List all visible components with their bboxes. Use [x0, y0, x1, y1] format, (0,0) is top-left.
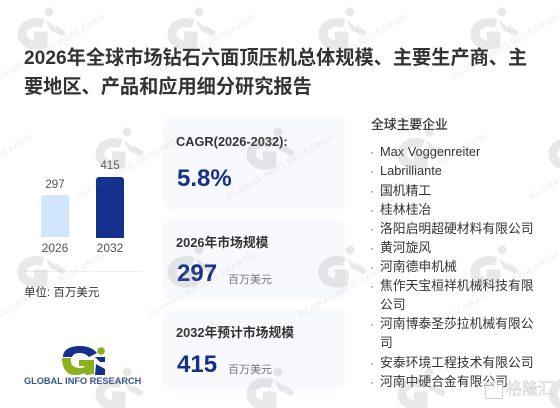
company list: Max Voggenreiter [380, 144, 480, 159]
CAGR value: 5.8% [177, 165, 232, 192]
company list: 焦作天宝桓祥机械科技有限 [380, 278, 534, 293]
panel: 2026 market size [163, 219, 345, 299]
gelonghui watermark: 格隆汇 [506, 381, 554, 398]
logo [24, 346, 141, 386]
company list: 国机精工 [380, 182, 431, 198]
company list: 安泰环境工程技术有限公司 [380, 355, 534, 370]
company list: · [370, 356, 374, 370]
company list: · [370, 260, 374, 274]
company list: 黄河旋风 [380, 240, 431, 255]
company list: 河南中硬合金有限公司 [380, 374, 508, 389]
company list: 桂林桂冶 [380, 202, 431, 216]
company list: · [370, 241, 374, 255]
2032 unit: 百万美元 [228, 364, 272, 376]
year 2032: 2032 [97, 241, 123, 255]
company list: 司 [380, 335, 393, 350]
bar 2026 [41, 195, 69, 237]
bar chart [41, 160, 124, 255]
company list: · [370, 164, 374, 178]
company list: · [370, 145, 374, 159]
CAGR label: CAGR(2026-2032): [176, 134, 288, 149]
year 2026: 2026 [42, 241, 68, 255]
panel: CAGR [163, 117, 345, 209]
panel: 2032 market size [163, 309, 345, 389]
2026 value: 297 [177, 260, 217, 287]
company list: 公司 [380, 297, 406, 312]
text: GLOBAL INFO RESEARCH [449, 12, 560, 82]
company list: · [370, 184, 374, 198]
text: GLOBAL INFO RESEARCH [376, 132, 487, 202]
text: GLOBAL INFO RESEARCH [297, 12, 408, 82]
2032 label: 2032年预计市场规模 [176, 325, 294, 340]
logo mark [62, 346, 105, 375]
text: GLOBAL INFO RESEARCH [146, 12, 257, 82]
text: GLOBAL INFO RESEARCH [74, 132, 185, 202]
value 415: 415 [100, 160, 120, 172]
2032 value: 415 [177, 351, 217, 378]
logo text: GLOBAL INFO RESEARCH [24, 376, 141, 386]
company list: · [370, 222, 374, 236]
company list: 洛阳启明超硬材料有限公司 [380, 220, 534, 236]
company list: Labrilliante [380, 163, 442, 178]
2026 label: 2026年市场规模 [176, 235, 268, 250]
text: GLOBAL INFO RESEARCH [146, 250, 257, 320]
title: 2026年全球市场钻石六面顶压机总体规模、主要生产商、主 [24, 48, 527, 69]
bar 2032 [96, 177, 124, 238]
company list [370, 144, 534, 389]
text: GLOBAL INFO RESEARCH [225, 132, 336, 202]
unit note: 单位: 百万美元 [24, 287, 99, 299]
company list: · [370, 317, 374, 331]
company list: · [370, 375, 374, 389]
company list: 河南博泰圣莎拉机械有限公 [380, 316, 534, 331]
gelonghui watermark [485, 380, 554, 399]
text: GLOBAL INFO RESEARCH [449, 250, 560, 320]
company list: 河南德申机械 [380, 259, 457, 274]
company list: · [370, 202, 374, 216]
title [24, 47, 527, 98]
value 297: 297 [45, 179, 65, 191]
text: GLOBAL INFO RESEARCH [297, 250, 408, 320]
company list heading: 全球主要企业 [371, 117, 448, 132]
title: 要地区、产品和应用细分研究报告 [24, 77, 312, 98]
2026 unit: 百万美元 [228, 274, 272, 286]
company list: · [370, 279, 374, 293]
